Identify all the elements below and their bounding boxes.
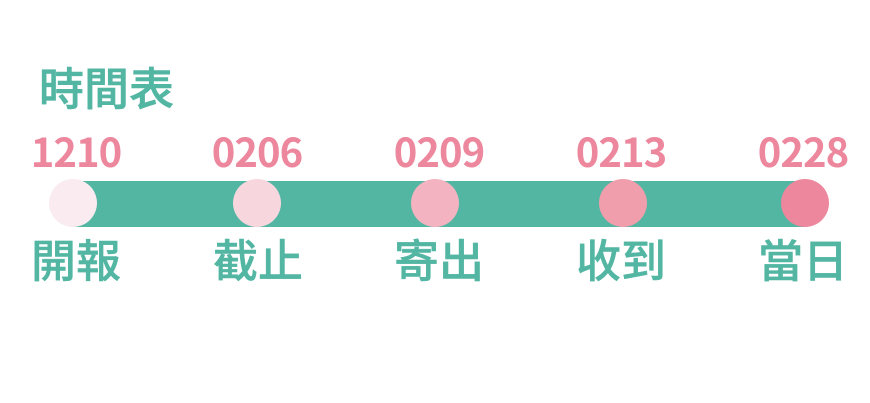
marker: 寄出 xyxy=(411,179,459,227)
label: 寄出: 寄出 xyxy=(394,225,484,290)
date: 0209: 0209 xyxy=(394,121,484,179)
marker: 收到 xyxy=(599,179,647,227)
label: 收到: 收到 xyxy=(576,225,666,290)
label: 截止: 截止 xyxy=(213,225,303,290)
title: 時間表 xyxy=(39,53,174,118)
date: 1210: 1210 xyxy=(31,121,121,179)
timeline bar xyxy=(73,181,805,227)
date: 0228: 0228 xyxy=(758,121,848,179)
date: 0206: 0206 xyxy=(212,121,302,179)
marker: 截止 xyxy=(233,179,281,227)
marker: 開報 xyxy=(49,179,97,227)
label: 開報: 開報 xyxy=(31,225,121,290)
date: 0213: 0213 xyxy=(576,121,666,179)
marker: 當日 xyxy=(781,179,829,227)
label: 當日: 當日 xyxy=(758,225,848,290)
